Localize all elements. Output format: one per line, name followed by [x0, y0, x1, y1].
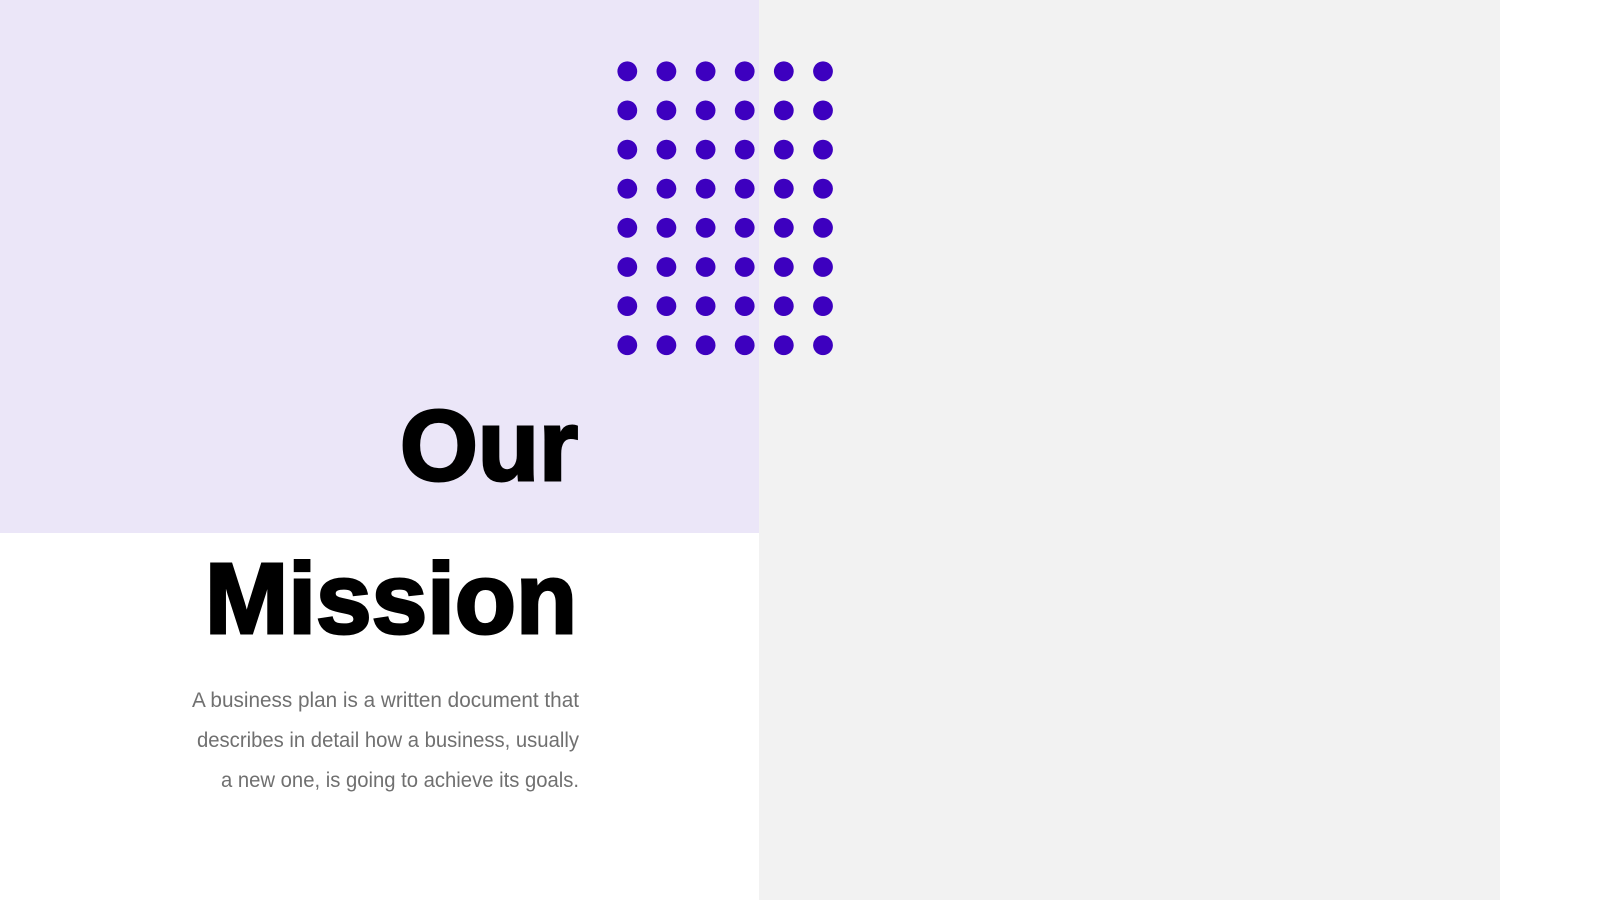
- body line 2: describes in detail how a business, usually: [197, 729, 579, 752]
- body text: [192, 689, 579, 792]
- title: [205, 390, 578, 655]
- dot grid: [617, 61, 833, 355]
- body line 1: A business plan is a written document that: [192, 689, 579, 712]
- panel: lavender background: [0, 0, 759, 533]
- body line 3: a new one, is going to achieve its goals.: [221, 769, 579, 792]
- panel: grey image placeholder: [759, 0, 1500, 900]
- title line: Our: Our: [400, 390, 578, 502]
- title line: Mission: Mission: [205, 543, 577, 655]
